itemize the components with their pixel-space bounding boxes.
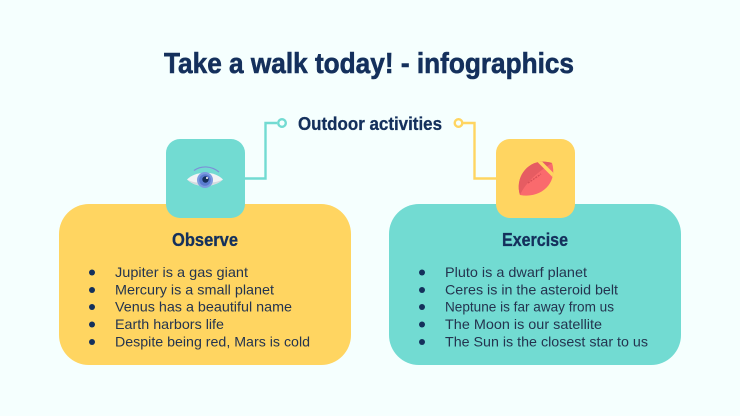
bullet list: exercise: Pluto is a dwarf planet [445, 264, 587, 280]
panel background: observe [59, 204, 351, 365]
heading: observe: Observe [172, 230, 238, 250]
panel: exercise [389, 204, 681, 365]
connector: left teal [245, 119, 286, 178]
bullet list: observe: Despite being red, Mars is cold [115, 334, 310, 350]
bullet list: exercise [419, 264, 648, 350]
icon tile: football [496, 139, 575, 218]
panel background: exercise [389, 204, 681, 365]
bullet list: exercise: The Moon is our satellite [445, 316, 602, 332]
bullet list: observe: Venus has a beautiful name [115, 298, 292, 314]
panel: observe [59, 204, 351, 365]
bullet list: observe: Earth harbors life [115, 316, 224, 332]
bullet list: observe [89, 264, 310, 350]
bullet list: observe: Jupiter is a gas giant [115, 264, 248, 280]
icon: eye [187, 167, 223, 188]
icon: football [519, 159, 554, 196]
bullet list: exercise: Ceres is in the asteroid belt [445, 282, 618, 298]
heading: exercise: Exercise [502, 230, 568, 250]
title: Take a walk today! - infographics [164, 48, 574, 80]
subtitle: outdoor activities: Outdoor activities [298, 114, 442, 134]
bullet list: exercise: Neptune is far away from us [445, 298, 614, 314]
icon tile: eye [166, 139, 245, 218]
bullet list: observe: Mercury is a small planet [115, 282, 274, 298]
connector: right yellow [455, 119, 496, 178]
bullet list: exercise: The Sun is the closest star to us [445, 334, 648, 350]
